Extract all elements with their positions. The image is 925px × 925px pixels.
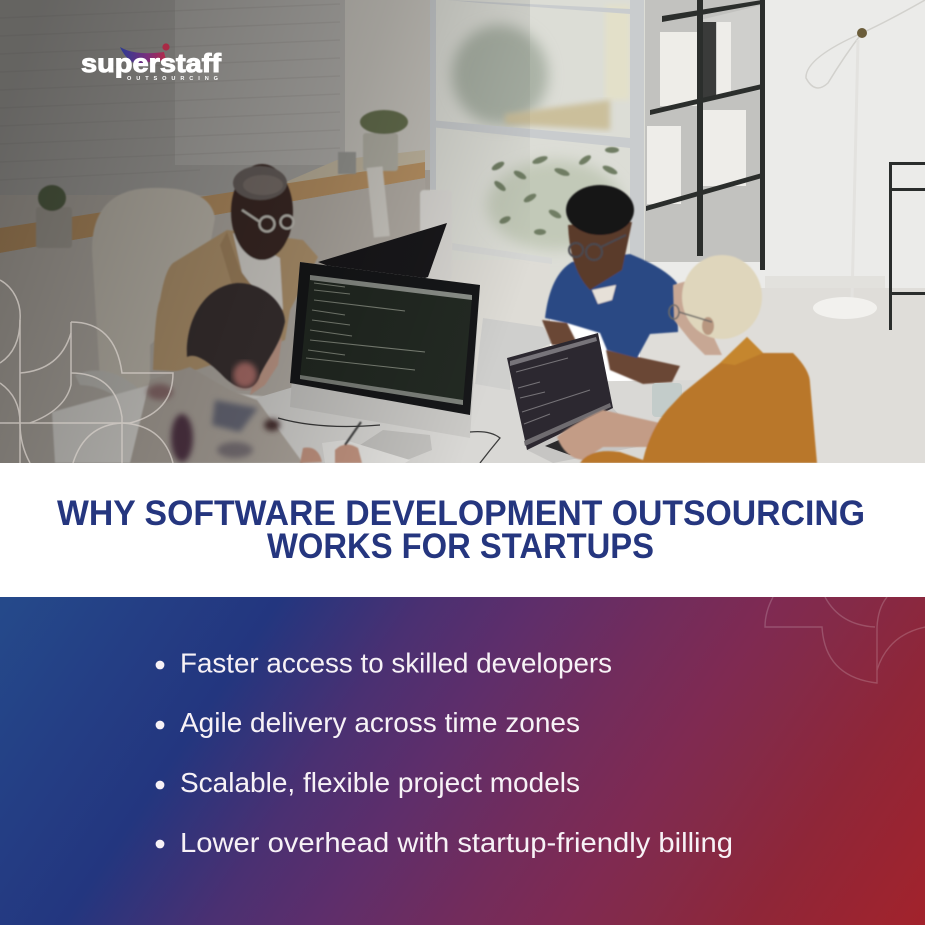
panel: office photo xyxy=(0,0,925,463)
hands and pen xyxy=(300,422,362,463)
man in tan blazer xyxy=(153,164,318,372)
window blinds xyxy=(0,4,340,180)
woman's face xyxy=(250,338,282,395)
logo wordmark: superstaff xyxy=(81,48,221,78)
superstaff logo xyxy=(81,43,221,82)
decorative line pattern xyxy=(0,280,173,463)
logo swoosh xyxy=(120,47,166,64)
bullet 3: Scalable, flexible project models xyxy=(180,767,580,798)
photo background room xyxy=(0,0,925,463)
title: WHY SOFTWARE DEVELOPMENT OUTSOURCING xyxy=(57,494,865,533)
glass partition frame xyxy=(430,0,644,264)
back of white laptop xyxy=(475,318,552,390)
bullet 2: Agile delivery across time zones xyxy=(180,707,580,738)
white desk xyxy=(262,380,640,463)
bullet 4: Lower overhead with startup-friendly billing xyxy=(180,827,733,858)
bullet list xyxy=(156,648,733,858)
woman in orange blazer, right xyxy=(557,255,817,463)
bookshelf xyxy=(645,0,765,270)
potted plants on sill xyxy=(36,110,452,280)
open dark laptop xyxy=(507,333,647,463)
panel: gradient benefits band xyxy=(0,597,925,925)
wall baseboard xyxy=(765,276,885,288)
central desktop monitor xyxy=(290,262,480,460)
rear dark monitor xyxy=(318,223,447,278)
blouse pattern xyxy=(147,384,280,462)
keyboard on desk xyxy=(322,440,410,463)
white office chair xyxy=(52,188,264,463)
logo tagline: OUTSOURCING xyxy=(127,76,218,82)
desk cables and glass xyxy=(278,383,682,463)
pendant lamp and wire xyxy=(806,0,925,319)
decorative line pattern, top right xyxy=(765,597,925,683)
black side table xyxy=(889,162,925,330)
panel: white title band xyxy=(0,463,925,597)
hair xyxy=(187,283,285,388)
bullet 1: Faster access to skilled developers xyxy=(180,648,612,678)
pink hair tips xyxy=(233,362,257,388)
floral blouse xyxy=(130,367,303,463)
glass partition with plants xyxy=(446,6,629,254)
title: WORKS FOR STARTUPS xyxy=(267,527,654,566)
woman in floral blouse, front left xyxy=(130,283,362,463)
title xyxy=(57,494,865,566)
left shade over photo xyxy=(0,0,530,463)
man in blue polo xyxy=(542,185,680,384)
